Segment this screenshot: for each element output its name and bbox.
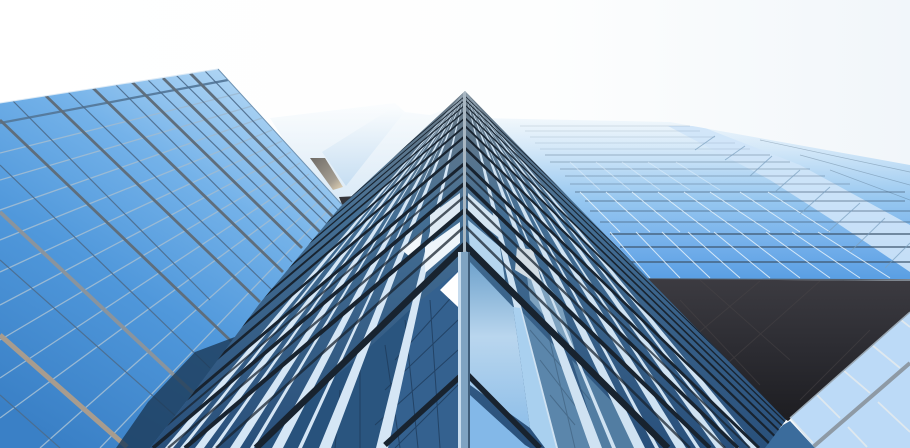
floor beams bbox=[152, 96, 786, 448]
background building in the fog bbox=[270, 100, 470, 212]
cross mullions of the left facade bbox=[0, 80, 333, 448]
thick diagonal mullions bbox=[0, 73, 333, 342]
stepped chevron band of the right facade bbox=[668, 126, 910, 272]
thin diagonal mullions bbox=[0, 71, 340, 448]
light vertical mullions, left face bbox=[165, 91, 465, 448]
bright window panes near the corner bbox=[402, 193, 556, 448]
lower right corner glass bbox=[762, 312, 910, 448]
central tower bbox=[150, 91, 786, 448]
left building glass facade bbox=[0, 69, 345, 448]
light vertical mullions, right face bbox=[465, 91, 758, 448]
reflected grid panes on the right face bbox=[522, 278, 634, 448]
dark reflection at the foot of the left facade bbox=[116, 335, 240, 448]
dark underside of the overhang bbox=[646, 279, 910, 421]
right building: upper glass facade bbox=[480, 118, 910, 280]
central corner column bbox=[458, 91, 470, 448]
dark glass panes on the left face bbox=[324, 271, 458, 448]
